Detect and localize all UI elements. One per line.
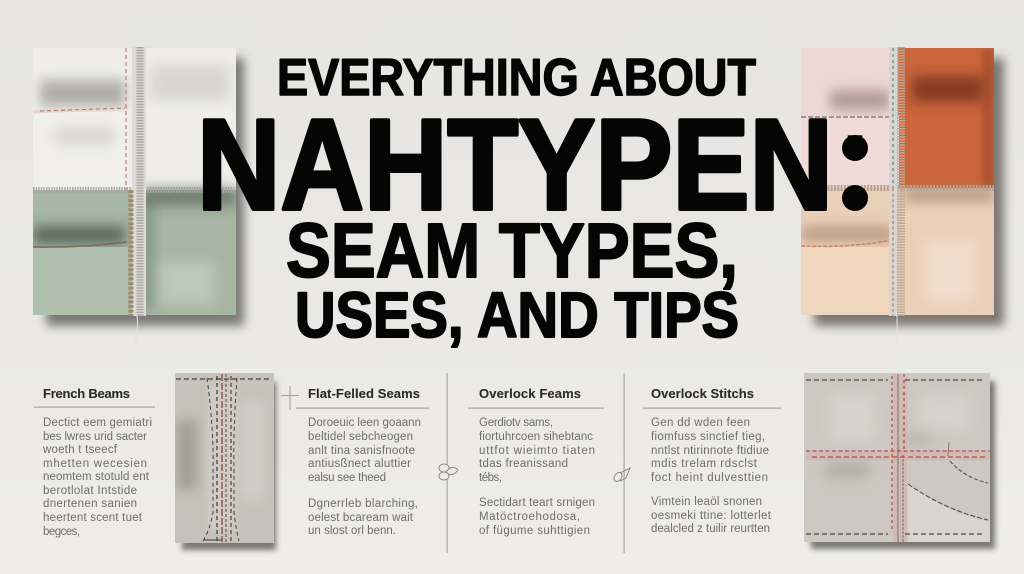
title [197, 48, 872, 351]
panel: Overlock Stitchs text: Gen dd wden feen [651, 417, 750, 429]
title: SEAM TYPES, [286, 208, 738, 294]
fabric swatch: pink, orange and peach seams [801, 47, 1004, 345]
fabric swatch: white and green seams [33, 47, 244, 345]
panel: French Beams text: French Beams [43, 386, 130, 401]
panel: Overlock Feams text: Gerdiotv sams, [479, 417, 553, 429]
icon: plus mark [281, 386, 299, 410]
panel: Overlock Stitchs text: Vimtein leaöl snonen [651, 496, 762, 508]
panel: Overlock Feams text: Overlock Feams [479, 386, 581, 401]
panel: Flat-Felled Seams text: un slost orl benn. [308, 525, 396, 537]
panel: Overlock Stitchs text: foct heint dulvesttien [651, 472, 768, 484]
panel: Overlock Feams text: Sectidart teart srnigen [479, 497, 595, 509]
panel: Overlock Stitchs text: oesmeki ttine: lotterlet [651, 510, 772, 522]
panel: Overlock Stitchs text: dealcled z tuilir reurtten [651, 523, 770, 535]
panel: French Beams text: dnertenen sanien [43, 498, 137, 510]
panel: French Beams text: woeth t tseecf [42, 444, 118, 456]
title: : [838, 80, 872, 239]
title: USES, AND TIPS [295, 279, 739, 351]
panel: Overlock Feams text: tébs, [479, 472, 502, 484]
panel: French Beams text [34, 386, 155, 538]
panel: Overlock Stitchs text: mdis trelam rdsclst [651, 458, 758, 470]
panel: Flat-Felled Seams text: ealsu see theed [308, 472, 386, 484]
fabric swatch: overlock stitch sample [804, 373, 995, 549]
panel: Overlock Feams text: of fügume suhttigien [479, 525, 590, 537]
panel: Flat-Felled Seams text [296, 386, 429, 537]
panel: Flat-Felled Seams text: Flat-Felled Seams [308, 386, 420, 401]
panel: Overlock Stitchs text [643, 386, 781, 535]
panel: Overlock Stitchs text: fiomfuss sinctief tieg, [651, 431, 765, 443]
fabric swatch: French seam sample [175, 373, 276, 550]
title: EVERYTHING ABOUT [277, 48, 756, 106]
panel: French Beams text: heertent scent tuet [43, 512, 143, 524]
icon: thread loop [439, 464, 458, 480]
panel: Overlock Feams text: uttfot wieimto tiaten [479, 445, 595, 457]
panel: Flat-Felled Seams text: oelest bcaream wait [308, 512, 414, 524]
panel: French Beams text: neomtem stotuld ent [43, 471, 150, 483]
panel: Overlock Stitchs text: Overlock Stitchs [651, 386, 754, 401]
title: NAHTYPEN [197, 93, 833, 237]
panel: French Beams text: berotlolat Intstide [43, 485, 137, 497]
panel: Flat-Felled Seams text: Doroeuic leen goaann [308, 417, 421, 429]
panel: French Beams text: bes lwres urid sacter [43, 431, 147, 443]
panel: French Beams text: mhetten wecesien [43, 458, 147, 470]
panel: Flat-Felled Seams text: antiusßnect aluttier [308, 458, 411, 470]
panel: Flat-Felled Seams text: beltidel sebcheogen [308, 431, 413, 443]
icon: safety pin [612, 468, 630, 483]
panel: Overlock Feams text: fiortuhrcoen sihebtanc [479, 431, 593, 443]
panel: Overlock Feams text: Matöctroehodosa, [479, 511, 580, 523]
panel: Overlock Feams text: tdas freanissand [479, 458, 568, 470]
panel: Overlock Stitchs text: nntlst ntirinnote ftidiue [651, 445, 769, 457]
panel: French Beams text: Dectict eem gemiatri [43, 417, 152, 429]
panel: Flat-Felled Seams text: Dgnerrleb blarching, [308, 498, 418, 510]
panel: Overlock Feams text [468, 386, 604, 537]
panel: French Beams text: begces, [43, 526, 80, 538]
panel: Flat-Felled Seams text: anlt tina sanisfnoote [308, 445, 415, 457]
